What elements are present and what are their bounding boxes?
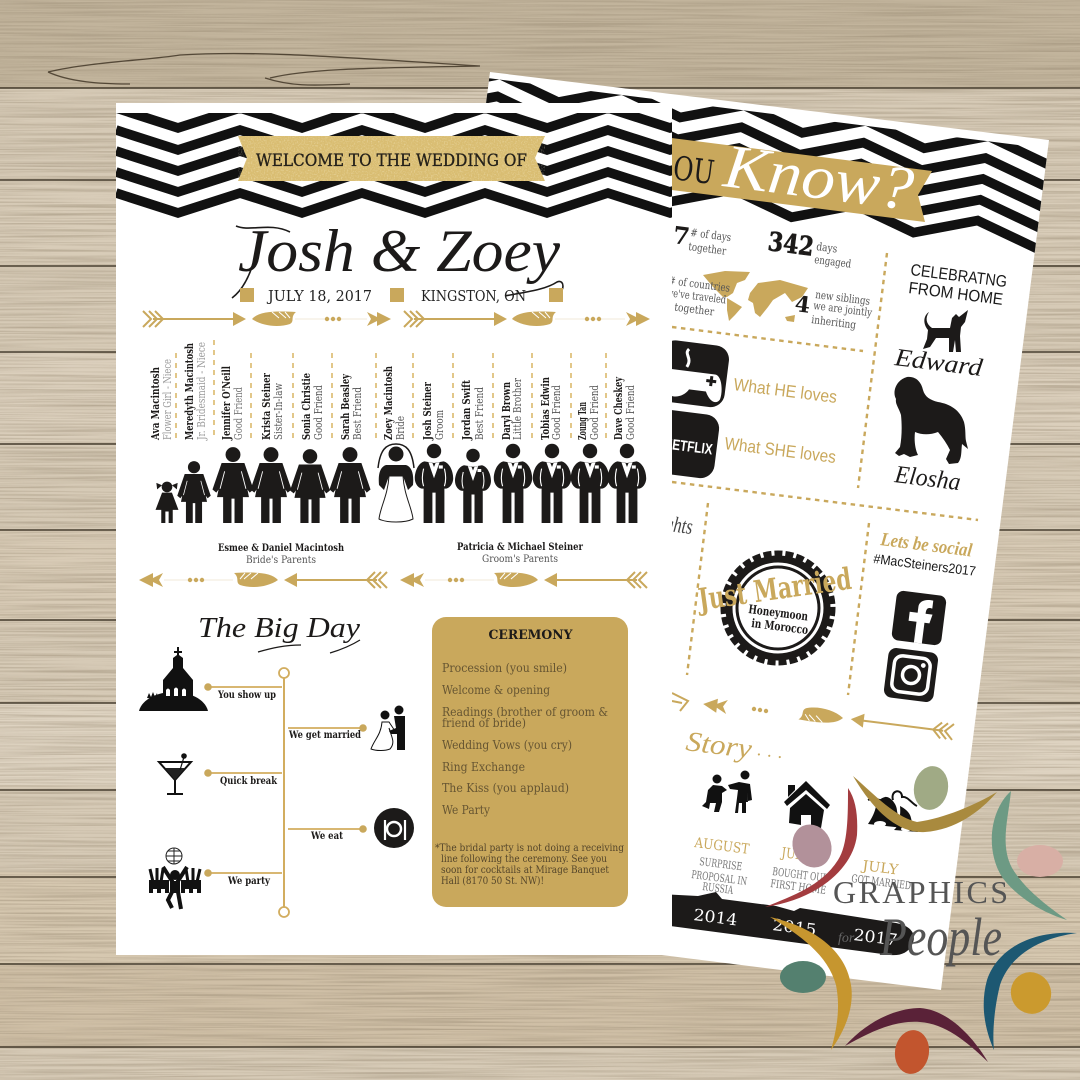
logo: graphics for people	[765, 763, 1077, 1076]
wedding party names: Best Friend	[473, 387, 486, 440]
panel: ceremony: soon for cocktails at Mirage Banquet	[441, 865, 609, 876]
stat: days engaged: days	[816, 240, 838, 256]
stat: days together: together	[688, 240, 728, 258]
logo dot: ochre	[1004, 966, 1058, 1020]
wedding party names: Josh Steiner	[421, 382, 434, 441]
what he loves: What HE loves	[732, 374, 838, 407]
logo dot: pink	[1017, 845, 1063, 877]
stamp: just married	[694, 554, 854, 662]
celebrating from home: CELEBRATNG	[909, 261, 1008, 291]
stat: countries: we've traveled	[666, 286, 727, 306]
ribbon: did you know	[640, 132, 932, 224]
wedding party names: Good Friend	[232, 387, 245, 440]
stat: countries: # of countries	[668, 274, 731, 295]
glitter ribbon heading	[238, 136, 545, 181]
stat: countries	[662, 274, 731, 319]
wedding party names: Sister-In-law	[272, 383, 285, 440]
wedding party names	[149, 342, 637, 441]
wedding party names: Jordan Swift	[460, 379, 473, 441]
timeline labels: We eat	[310, 830, 343, 842]
milestone: 2014 proposal: SURPRISE	[699, 855, 743, 873]
glitter ribbon heading: WELCOME TO THE WEDDING OF	[256, 151, 527, 171]
icon: wedding bells	[868, 791, 918, 832]
timeline labels	[217, 689, 362, 887]
icon: netflix	[645, 408, 721, 480]
panel: ceremony: line following the ceremony. See you	[441, 854, 607, 865]
panel: ceremony: We Party	[442, 803, 490, 817]
stamp: just married: Honeymoon	[748, 602, 809, 624]
icon: couple	[371, 706, 405, 750]
stat: countries: to together	[662, 299, 715, 319]
wedding party figures	[156, 444, 646, 523]
logo wordmark: People	[879, 907, 1002, 967]
logo swoosh: ochre top	[853, 776, 997, 832]
edward name: Edward	[892, 344, 984, 382]
icon: proposal	[702, 770, 752, 813]
wedding party names: Tobias Edwin	[539, 377, 552, 440]
milestone: 2017 married: GOT MARRIED	[851, 872, 912, 893]
wedding party names: Ava Macintosh	[149, 367, 162, 441]
brides parents: Bride's Parents	[246, 554, 316, 566]
wedding party names: Zoey Macintosh	[382, 366, 395, 440]
figure: flower girl	[156, 482, 178, 523]
stamp: just married: in Morocco	[751, 616, 809, 637]
panel: ceremony: Wedding Vows (you cry)	[442, 738, 572, 752]
logo swoosh: teal	[992, 791, 1067, 920]
arrow row top	[143, 311, 650, 327]
wedding party names: Good Friend	[312, 385, 325, 440]
back card: did you know	[486, 72, 1049, 990]
icon: poodle	[894, 377, 968, 464]
front card sheet	[116, 103, 672, 955]
stat: days together: # of days	[690, 226, 732, 244]
our story heading: Story	[684, 726, 754, 765]
big day timeline	[204, 668, 367, 917]
lets be social	[873, 529, 977, 579]
icon: party crowd	[149, 848, 201, 909]
wedding party names: Groom	[433, 410, 446, 440]
brides parents: Esmee & Daniel Macintosh	[218, 542, 344, 554]
timeline labels: You show up	[217, 689, 276, 701]
stat: new siblings: we are jointly	[813, 299, 873, 319]
logo dot: sage	[910, 763, 952, 813]
icon: facebook	[891, 590, 947, 646]
logo wordmark	[833, 874, 1008, 967]
icon: game controller	[655, 339, 731, 409]
hidden script fragment: ights	[659, 510, 694, 539]
dotted dividers	[672, 253, 978, 695]
milestone: 2015 house	[770, 845, 829, 897]
stat: days engaged: engaged	[814, 253, 852, 271]
wedding party names: Flower Girl - Niece	[161, 359, 174, 440]
wedding party names: Jr. Bridesmaid - Niece	[195, 342, 208, 441]
wedding party names: Daryl Brown	[500, 382, 513, 440]
milestone: 2014 proposal: PROPOSAL IN	[691, 868, 748, 888]
dashed party dividers	[176, 340, 606, 440]
front chevron band	[116, 108, 732, 213]
milestone: 2014 proposal	[691, 835, 751, 897]
icon: netflix: NETFLIX	[663, 435, 714, 458]
arrow divider	[672, 693, 954, 740]
logo dot: orange	[892, 1028, 932, 1076]
logo wordmark: for	[838, 931, 855, 946]
timeline bar	[640, 892, 914, 955]
panel: ceremony: Welcome & opening	[442, 683, 550, 697]
icon: church	[139, 647, 208, 711]
wedding party names: Jennifer O'Neill	[220, 366, 233, 441]
milestone: 2017 married	[851, 858, 912, 893]
milestone: 2014 proposal: RUSSIA	[702, 880, 735, 897]
logo dot: mauve	[785, 818, 839, 874]
figure: bride	[378, 444, 414, 522]
timeline bar: 2015	[771, 915, 818, 939]
wedding party names: Bride	[394, 416, 407, 440]
icon: martini	[159, 753, 191, 794]
milestone: 2014 proposal: AUGUST	[693, 835, 751, 858]
stat: new siblings: inheriting	[811, 313, 857, 332]
date and place row	[240, 287, 563, 305]
front card: welcome	[116, 103, 732, 955]
wedding party names: Zoung Tan	[576, 402, 589, 440]
panel: ceremony: Procession (you smile)	[442, 661, 567, 675]
milestone: 2015 house: JUNE	[779, 845, 814, 865]
elosha name: Elosha	[892, 461, 962, 496]
grooms parents: Groom's Parents	[482, 553, 558, 565]
logo swoosh: red	[765, 788, 857, 907]
icon: house	[784, 781, 830, 828]
stat: days together	[671, 220, 732, 258]
panel: ceremony: The Kiss (you applaud)	[442, 781, 569, 795]
panel: ceremony: Hall (8170 50 St. NW)!	[441, 876, 544, 887]
grooms parents: Patricia & Michael Steiner	[457, 541, 583, 553]
logo swoosh: blue	[984, 933, 1077, 1050]
panel: ceremony: *The bridal party is not doing a receiving	[435, 843, 625, 854]
timeline bar: 2014	[692, 905, 739, 929]
world map	[703, 271, 808, 322]
names: Josh & Zoey	[238, 218, 560, 284]
icon: chihuahua	[923, 310, 968, 352]
logo dot: green	[780, 961, 826, 993]
panel: ceremony: Ring Exchange	[442, 760, 525, 774]
wedding party names: Krista Steiner	[260, 373, 273, 440]
lets be social: #MacSteiners2017	[873, 551, 977, 579]
milestone: 2015 house: BOUGHT OUR	[772, 865, 829, 885]
timeline labels: We get married	[288, 729, 362, 741]
what she loves: What SHE loves	[723, 433, 837, 467]
logo swoosh: maroon	[845, 1008, 988, 1062]
stamp: just married: Just Married	[694, 562, 854, 618]
icon: instagram	[883, 647, 939, 703]
wedding party names: Sarah Beasley	[339, 374, 352, 440]
stat: new siblings: 4	[793, 291, 812, 319]
celebrating from home: FROM HOME	[907, 279, 1004, 309]
stat: days engaged	[766, 227, 852, 271]
ribbon: did you know: Know?	[719, 132, 917, 224]
stat: new siblings: new siblings	[815, 288, 871, 308]
ribbon: did you know: OU	[671, 148, 717, 192]
stat: new siblings	[793, 288, 873, 332]
grooms parents	[457, 541, 583, 565]
panel: ceremony: CEREMONY	[488, 628, 573, 643]
back chevron band	[486, 78, 1047, 253]
arrow row bottom	[139, 572, 647, 588]
wedding party names: Good Friend	[624, 385, 637, 440]
stat: days engaged: 342	[766, 227, 816, 263]
date and place row: JULY 18, 2017	[266, 287, 372, 305]
timeline labels: Quick break	[220, 775, 278, 787]
celebrating from home	[907, 261, 1008, 309]
wedding party names: Good Friend	[550, 385, 563, 440]
back card sheet	[382, 72, 1049, 990]
the big day heading: The Big Day	[198, 612, 360, 644]
our story heading: ...	[756, 739, 790, 763]
wedding party names: Dave Cheskey	[612, 377, 625, 440]
icon: plate	[374, 808, 414, 848]
date and place row: KINGSTON, ON	[421, 287, 526, 305]
panel: ceremony: Readings (brother of groom &	[442, 705, 608, 719]
our story heading	[684, 726, 790, 765]
milestone: 2017 married: JULY	[859, 858, 900, 879]
stat: days together: 7	[671, 220, 691, 251]
panel: ceremony	[432, 617, 628, 907]
wedding party names: Little Brother	[511, 377, 524, 440]
logo wordmark: GRAPHICS	[833, 874, 1008, 910]
milestone: 2015 house: FIRST HOME	[770, 877, 827, 897]
lets be social: Lets be social	[879, 529, 974, 562]
logo swoosh: gold left	[770, 917, 852, 1050]
wedding party names: Meredyth Macintosh	[183, 343, 196, 440]
wedding party names: Best Friend	[351, 387, 364, 440]
timeline bar: 2017	[852, 925, 899, 949]
timeline labels: We party	[227, 875, 271, 887]
wedding party names: Sonia Christie	[300, 373, 313, 440]
brides parents	[218, 542, 344, 566]
panel: ceremony: friend of bride)	[442, 716, 526, 730]
wedding party names: Good Friend	[588, 385, 601, 440]
